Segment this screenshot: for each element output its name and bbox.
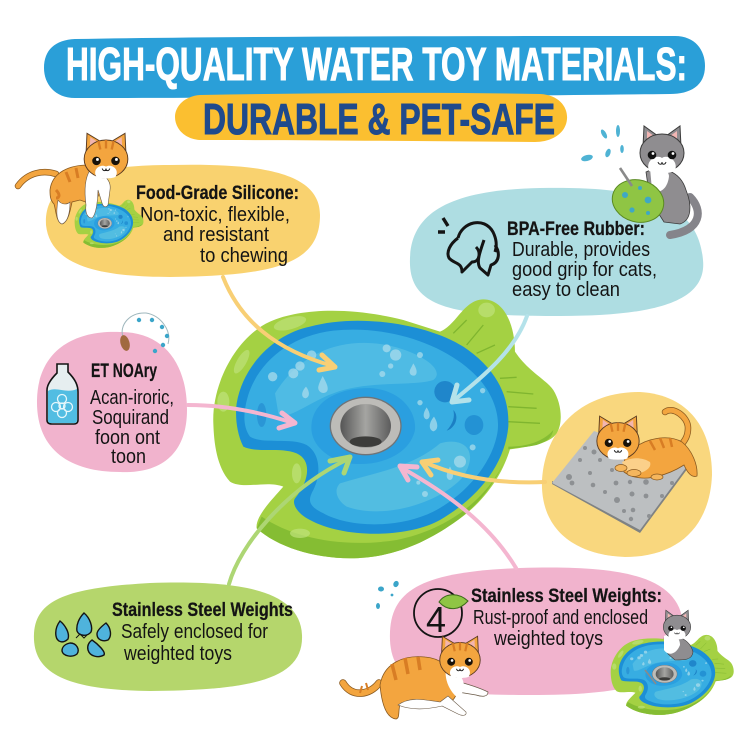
panel: ET NOAry: Acan-iroric,	[90, 386, 174, 409]
subtitle: yellow pill: DURABLE & PET-SAFE	[203, 95, 555, 144]
panel: stainless steel weights, green: weighted toys	[123, 642, 232, 665]
panel: stainless steel weights, pink: weighted toys	[493, 627, 603, 650]
panel: food-grade silicone	[46, 165, 320, 277]
icon: water splashes	[580, 125, 624, 162]
icon: numbered circle with leaf	[376, 580, 468, 640]
panel: food-grade silicone: to chewing	[200, 244, 288, 267]
panel: food-grade silicone: Food-Grade Silicone:	[136, 183, 299, 204]
panel: food-grade silicone: Non-toxic, flexible,	[140, 203, 290, 226]
panel: ET NOAry	[37, 313, 187, 472]
main illustration: fish-shaped toy	[213, 299, 561, 558]
panel: BPA-free rubber: BPA-Free Rubber:	[507, 219, 645, 240]
panel: ET NOAry: ET NOAry	[91, 361, 157, 382]
arrow: ET NOAry	[188, 405, 295, 428]
panel: ET NOAry: toon	[111, 445, 146, 468]
panel: stainless steel weights, pink	[376, 568, 683, 695]
arrow: rubber	[452, 316, 527, 402]
panel: stainless steel weights, green: Safely enclosed for	[121, 620, 268, 643]
arrow: pink weights	[400, 466, 516, 568]
panel: stainless steel weights, green: Stainless Steel Weights	[112, 600, 293, 621]
arrow: green weights	[229, 457, 350, 584]
illustration: grey cat with ball	[580, 125, 698, 235]
panel: stainless steel weights, green	[34, 583, 302, 691]
arrow: mat	[422, 460, 545, 482]
icon: bottle	[47, 364, 78, 424]
panel: BPA-free rubber: good grip for cats,	[512, 258, 657, 281]
panel: food-grade silicone: and resistant	[163, 223, 269, 246]
illustration: orange cat walking	[343, 636, 488, 719]
icon: numbered circle with leaf: 4	[426, 599, 446, 640]
icon: head outline	[438, 218, 498, 275]
panel: stainless steel weights, pink: Rust-proof and enclosed	[473, 606, 648, 629]
illustration: orange cat standing	[18, 133, 128, 224]
illustration: perforated mat	[552, 431, 688, 533]
illustration: mini toy, bottom right	[611, 635, 734, 715]
panel: textured mat with cat	[542, 392, 712, 557]
panel: ET NOAry: Soquirand	[92, 406, 169, 429]
panel: BPA-free rubber: easy to clean	[512, 278, 620, 301]
illustration: mini toy under orange cat	[75, 200, 143, 248]
icon: paw of droplets	[56, 613, 110, 657]
panel: ET NOAry: foon ont	[95, 426, 160, 449]
arrow: silicone	[223, 277, 335, 370]
illustration: orange cat on mat	[597, 410, 697, 480]
subtitle: yellow pill	[175, 93, 567, 144]
panel: BPA-free rubber: Durable, provides	[512, 238, 650, 261]
icon: seed with droplets	[119, 313, 169, 353]
panel: stainless steel weights, pink: Stainless Steel Weights:	[471, 586, 662, 607]
illustration: grey cat on mini toy	[645, 610, 693, 684]
panel: BPA-free rubber	[410, 188, 703, 316]
